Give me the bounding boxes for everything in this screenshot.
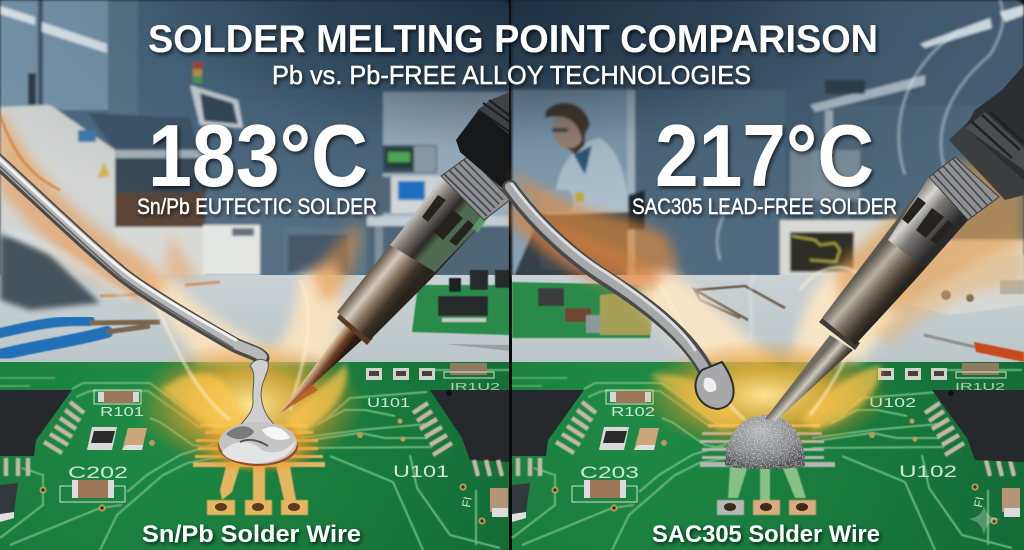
wire on bench <box>695 286 785 320</box>
bench right <box>512 275 1024 363</box>
iron barrel <box>337 178 490 340</box>
caption: SAC305 wire: SAC305 Solder Wire <box>652 521 880 548</box>
left panel <box>0 0 512 550</box>
stat label: Sn/Pb eutectic: Sn/Pb EUTECTIC SOLDER <box>137 194 377 219</box>
pcb labels left <box>68 382 501 509</box>
via holes left <box>215 503 300 511</box>
subtitle: Pb vs. Pb-FREE ALLOY TECHNOLOGIES <box>272 60 751 90</box>
solder blob left <box>218 422 298 466</box>
iron tip <box>279 325 362 414</box>
pcb labels left: FI <box>459 496 475 509</box>
pcb labels right: U102 <box>899 462 957 481</box>
caption: Sn/Pb wire: Sn/Pb Solder Wire <box>142 521 361 548</box>
pcb labels right: R102 <box>611 404 655 419</box>
smoke wisps left <box>0 232 130 300</box>
centre divider <box>509 0 512 550</box>
title: SOLDER MELTING POINT COMPARISON <box>148 18 878 61</box>
knurled ring <box>929 157 999 220</box>
pcb labels right: U102 <box>869 395 916 410</box>
stat: 217°C: 217°C <box>655 106 874 205</box>
stat: 183°C: 183°C <box>148 106 368 205</box>
instrument base <box>860 255 1024 315</box>
pcb labels right: FI <box>971 496 987 509</box>
oscilloscope <box>780 220 900 285</box>
PCB in background right <box>512 282 655 338</box>
watermark star <box>968 505 1000 535</box>
monitor <box>190 85 243 128</box>
blue pliers <box>0 321 160 355</box>
molten drip left <box>236 359 282 432</box>
pcb labels left: U101 <box>393 462 449 481</box>
flames left <box>0 105 365 474</box>
lab background left <box>0 0 510 280</box>
pcb labels left: C202 <box>68 463 128 482</box>
top vignette right <box>512 0 1024 275</box>
reflow oven <box>0 105 260 280</box>
PCB traces right <box>512 363 1024 550</box>
PCB in background <box>412 270 510 335</box>
PCB board <box>0 362 510 550</box>
solder mound right <box>725 415 805 469</box>
black grip <box>456 92 510 195</box>
solder pads left <box>193 424 325 515</box>
solder wire left <box>0 152 262 358</box>
pcb labels right: C203 <box>580 463 639 482</box>
tweezers <box>445 344 510 351</box>
background machine base <box>0 232 100 310</box>
scientist <box>512 103 645 280</box>
PCB board right <box>512 362 1024 550</box>
soldering iron left <box>279 92 510 414</box>
via holes right <box>724 503 808 511</box>
lab background right <box>512 0 1024 315</box>
top vignette left <box>0 0 510 275</box>
knurled ring <box>441 153 510 220</box>
red tweezers <box>924 335 1024 362</box>
tower light <box>193 62 202 83</box>
pcb labels left: U101 <box>367 395 410 410</box>
pcb labels left: R101 <box>100 404 144 419</box>
iron barrel <box>822 177 968 345</box>
solder droplet right <box>695 362 734 409</box>
flames right <box>512 160 1024 451</box>
stat label: SAC305: SAC305 LEAD-FREE SOLDER <box>632 194 897 219</box>
pcb labels right <box>580 382 1006 509</box>
soldering iron right <box>765 65 1024 421</box>
pcb labels right: IR1U2 <box>955 382 1006 393</box>
solder pads right <box>700 424 835 515</box>
smoke wisps right <box>717 0 1003 340</box>
iron tip <box>765 335 853 421</box>
right chip shift cover <box>932 390 1024 462</box>
bench <box>0 275 510 363</box>
black grip <box>949 115 1024 200</box>
pcb labels left: IR1U2 <box>450 382 501 393</box>
solder wire right <box>510 184 708 375</box>
right panel <box>510 0 1024 550</box>
equipment <box>365 145 443 213</box>
